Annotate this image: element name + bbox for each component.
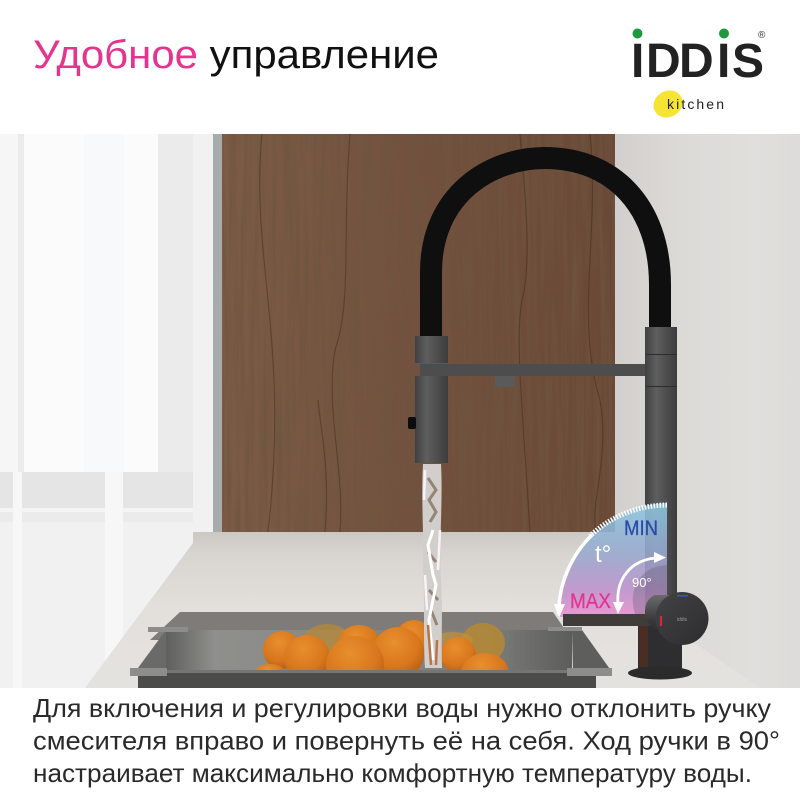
bar nub (495, 376, 515, 387)
curtain and window (0, 134, 213, 688)
text: настраивает максимально комфортную температуру воды. (33, 758, 752, 788)
handle cylinder (645, 595, 682, 645)
title: Удобное управление (33, 33, 439, 77)
label MAX: MAX (570, 590, 611, 613)
colander basin (166, 630, 573, 672)
button (408, 417, 416, 429)
quarter sector (558, 503, 667, 617)
red mark (660, 616, 662, 626)
wall left (0, 134, 222, 688)
wood panel (222, 134, 615, 532)
oranges (255, 620, 509, 694)
right wall (573, 630, 612, 672)
blue mark (677, 595, 688, 596)
logo: IDDIS kitchen: ® (758, 30, 766, 41)
crossbar (420, 364, 652, 376)
label t°: t° (595, 541, 611, 568)
base plate (628, 666, 692, 680)
handle (563, 592, 708, 645)
label 90°: 90° (632, 575, 652, 590)
left collar (415, 336, 448, 363)
photo: kitchen scene (0, 134, 800, 694)
brand: iddis (677, 617, 688, 623)
logo: IDDIS kitchen (631, 28, 766, 123)
inner cutout shade (633, 565, 667, 617)
sink front rim (138, 670, 596, 688)
logo: IDDIS kitchen: kitchen (667, 96, 724, 112)
rim ticks (590, 505, 667, 536)
description text (0, 688, 800, 800)
text: Для включения и регулировки воды нужно отклонить ручку (33, 693, 771, 723)
label MIN: MIN (624, 517, 658, 540)
wall right (615, 134, 800, 688)
wall shadow beside panel (213, 134, 223, 532)
sink (130, 612, 612, 694)
handle disc (656, 592, 708, 645)
faucet (408, 158, 692, 680)
text: смесителя вправо и повернуть её на себя. Ход ручки в 90° (33, 726, 780, 756)
inner arc arrow (618, 558, 656, 604)
back ledge (150, 612, 572, 640)
column (645, 327, 677, 607)
temperature diagram: MIN MAX (554, 503, 667, 618)
lower body (638, 622, 682, 670)
spray head (415, 376, 448, 463)
left wall (135, 630, 166, 672)
countertop (85, 532, 760, 688)
colander handles (130, 668, 167, 676)
water stream (422, 464, 442, 668)
outer arrow (559, 535, 592, 606)
logo: IDDIS kitchen: IDDIS (631, 35, 764, 88)
hose (431, 158, 660, 338)
lever (563, 614, 653, 626)
